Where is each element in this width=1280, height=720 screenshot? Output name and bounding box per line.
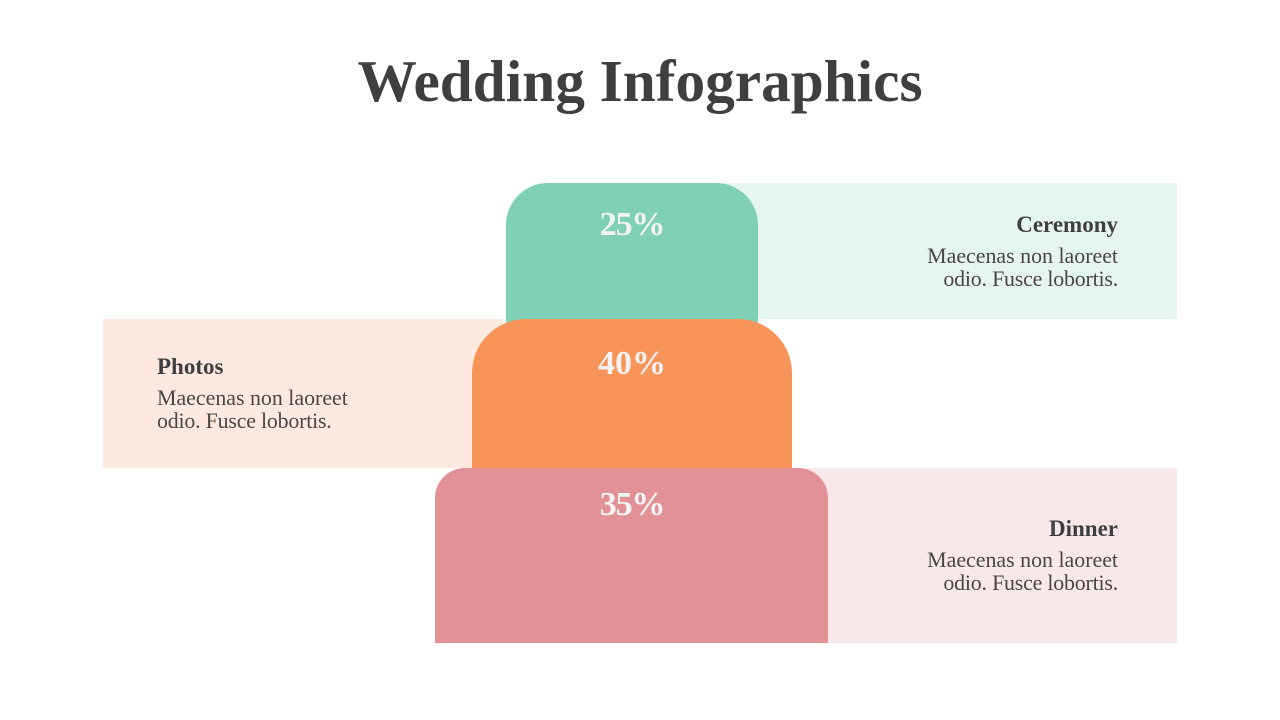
cake tier: dinner <box>435 468 828 643</box>
description: photos: Maecenas non laoreet <box>157 385 348 410</box>
description: dinner <box>927 547 1118 595</box>
heading: ceremony: Ceremony <box>1016 212 1118 237</box>
percentage: 35%: 35% <box>600 486 664 523</box>
description: dinner: Maecenas non laoreet <box>927 547 1118 572</box>
description: ceremony: Maecenas non laoreet <box>927 243 1118 268</box>
heading: dinner: Dinner <box>1049 516 1118 541</box>
description: photos <box>157 385 348 433</box>
description: photos: odio. Fusce lobortis. <box>157 408 332 433</box>
description: ceremony: odio. Fusce lobortis. <box>943 266 1118 291</box>
title: Wedding Infographics <box>357 48 923 114</box>
panel: ceremony band <box>720 183 1177 319</box>
cake tier: ceremony <box>506 183 758 329</box>
percentage: 25%: 25% <box>600 206 664 243</box>
panel: photos band <box>103 319 503 468</box>
description: ceremony <box>927 243 1118 291</box>
text block: ceremony <box>927 212 1118 291</box>
description: dinner: odio. Fusce lobortis. <box>943 570 1118 595</box>
cake tier: photos <box>472 319 792 478</box>
heading: photos: Photos <box>157 354 223 379</box>
text block: dinner <box>927 516 1118 595</box>
panel: dinner band <box>790 468 1177 643</box>
text block: photos <box>157 354 348 433</box>
percentage: 40%: 40% <box>598 345 666 382</box>
